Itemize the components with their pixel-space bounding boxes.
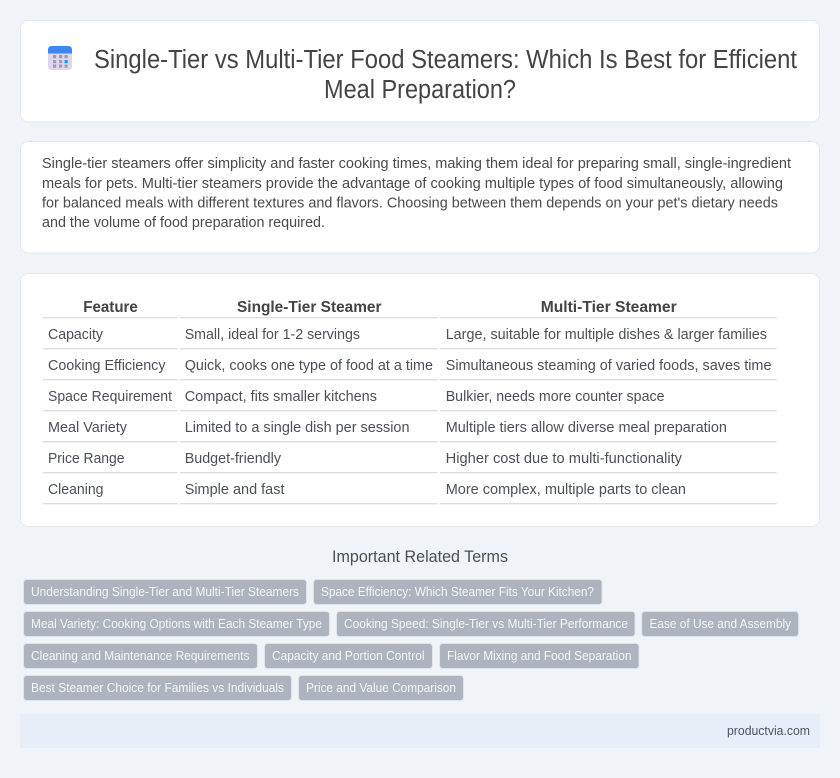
table header: Multi-Tier Steamer — [541, 299, 677, 316]
row: capacity — [48, 327, 767, 343]
row: cooking efficiency — [48, 358, 772, 374]
intro paragraph: meals for pets. Multi-tier steamers provide the advantage of cooking multiple types of food simultaneously, allowing — [42, 176, 783, 192]
row: price range: Budget-friendly — [185, 451, 282, 467]
panel: introduction — [20, 142, 820, 253]
heading: important related terms: Important Related Terms — [332, 548, 508, 566]
row: meal variety: Multiple tiers allow diverse meal preparation — [446, 420, 727, 436]
title text — [94, 46, 797, 104]
row: price range — [48, 451, 683, 467]
row: space requirement: Space Requirement — [48, 389, 172, 405]
row: space requirement: Compact, fits smaller kitchens — [185, 389, 377, 405]
table header: Single-Tier Steamer — [237, 299, 382, 316]
related terms chips — [24, 580, 798, 700]
row: price range: Price Range — [48, 451, 124, 467]
related terms chips: Understanding Single-Tier and Multi-Tier Steamers — [31, 585, 299, 599]
row: capacity: Small, ideal for 1-2 servings — [185, 327, 360, 343]
row: capacity: Large, suitable for multiple dishes & larger families — [446, 327, 767, 343]
panel: comparison table — [20, 274, 820, 526]
title text: Meal Preparation? — [324, 76, 516, 104]
row: space requirement: Bulkier, needs more counter space — [446, 389, 664, 405]
row: cooking efficiency: Simultaneous steaming of varied foods, saves time — [446, 358, 772, 374]
row: cleaning: Simple and fast — [185, 482, 284, 498]
row: space requirement — [48, 389, 664, 405]
row: cooking efficiency: Quick, cooks one type of food at a time — [185, 358, 433, 374]
intro paragraph: for balanced meals with different textures and flavors. Choosing between them depends on your pet's dietary needs — [42, 196, 778, 212]
row: cooking efficiency: Cooking Efficiency — [48, 358, 166, 374]
related terms chips: Best Steamer Choice for Families vs Individuals — [31, 681, 284, 695]
table header: Feature — [83, 299, 138, 316]
footer — [20, 714, 820, 748]
icon: calendar grid — [48, 46, 72, 70]
intro paragraph: Single-tier steamers offer simplicity and faster cooking times, making them ideal for preparing small, single-ingredient — [42, 156, 791, 172]
row: cleaning: Cleaning — [48, 482, 104, 498]
panel: title — [20, 20, 820, 122]
row: price range: Higher cost due to multi-functionality — [446, 451, 683, 467]
related terms chips: Price and Value Comparison — [306, 681, 456, 695]
row: meal variety: Limited to a single dish per session — [185, 420, 410, 436]
related terms chips: Space Efficiency: Which Steamer Fits Your Kitchen? — [321, 585, 594, 599]
title text: Single-Tier vs Multi-Tier Food Steamers: Which Is Best for Efficient — [94, 46, 797, 74]
related terms chips: Cleaning and Maintenance Requirements — [31, 649, 250, 663]
intro paragraph — [42, 156, 791, 231]
intro paragraph: and the volume of food preparation required. — [42, 215, 325, 231]
related terms chips: Capacity and Portion Control — [272, 649, 424, 663]
table header — [83, 299, 677, 316]
related terms chips: Flavor Mixing and Food Separation — [447, 649, 632, 663]
row: cleaning: More complex, multiple parts to clean — [446, 482, 686, 498]
related terms chips: Ease of Use and Assembly — [650, 617, 792, 631]
row: meal variety: Meal Variety — [48, 420, 128, 436]
related terms chips: Cooking Speed: Single-Tier vs Multi-Tier Performance — [344, 617, 628, 631]
row: capacity: Capacity — [48, 327, 104, 343]
row: meal variety — [48, 420, 727, 436]
footer: productvia.com — [727, 723, 810, 738]
related terms chips: Meal Variety: Cooking Options with Each Steamer Type — [31, 617, 322, 631]
row: cleaning — [48, 482, 686, 498]
